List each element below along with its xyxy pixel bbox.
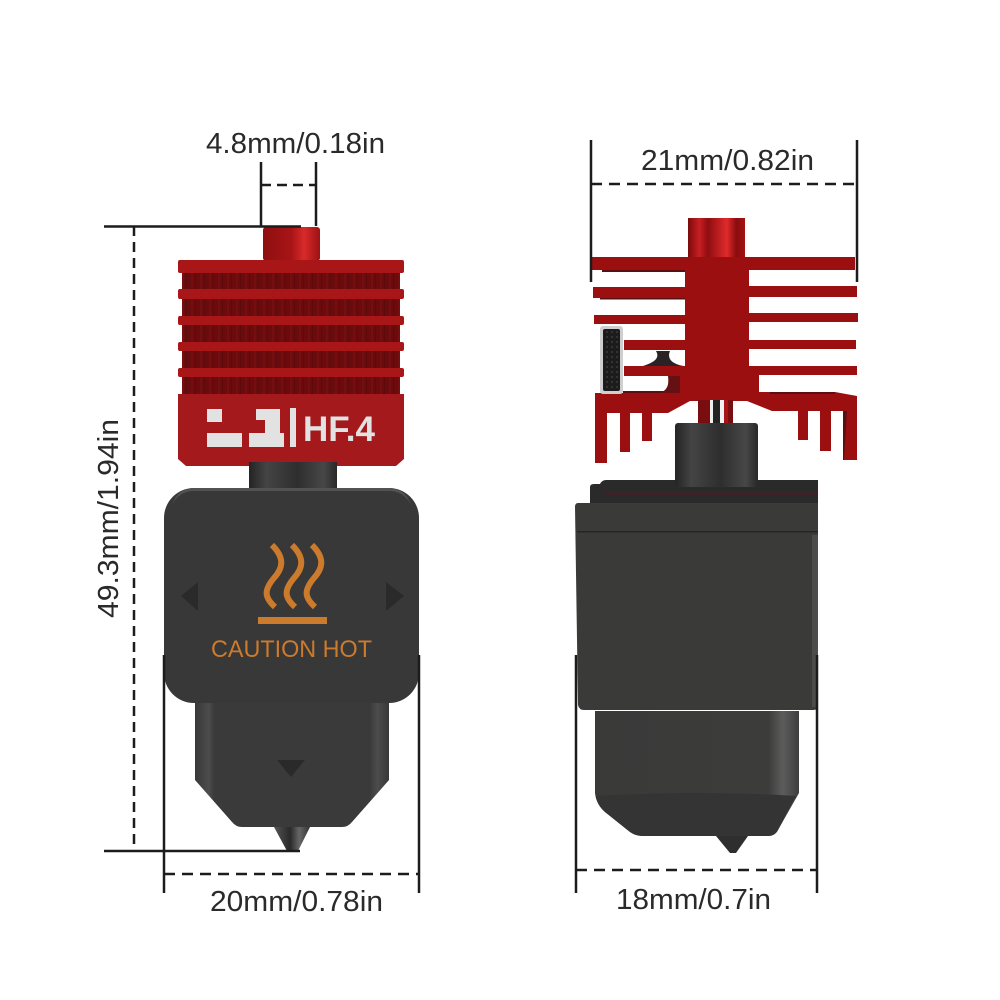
label: front width: 20mm/0.78in (210, 886, 383, 918)
bridge shadow (643, 351, 684, 366)
side heatsink (592, 257, 858, 463)
label: heatsink width: 21mm/0.82in (641, 145, 814, 177)
heatbreak pipes (698, 400, 733, 424)
housing seam (577, 531, 818, 532)
plate red reflection (606, 491, 818, 495)
label: pin diameter: 4.8mm/0.18in (206, 128, 385, 160)
lower nozzle cover (195, 703, 389, 827)
logo: brand mark (207, 408, 376, 449)
pin: top tube (263, 227, 320, 261)
pin width dash (261, 184, 316, 186)
right view: hotend side (575, 218, 858, 853)
top right brackets (591, 140, 857, 282)
height extension lines (104, 226, 301, 851)
side width brackets (576, 655, 817, 893)
heater cover (164, 488, 419, 703)
icon: heat bar (258, 617, 327, 624)
icon: heat waves (267, 545, 321, 607)
front width brackets (164, 655, 419, 893)
heatsink: fins (178, 260, 404, 377)
dimension lines (104, 140, 857, 893)
label: height: 49.3mm/1.94in (93, 419, 125, 618)
side housing (575, 503, 818, 710)
lower cover bevel (596, 793, 796, 836)
side neck (675, 423, 758, 487)
top right dash (591, 183, 857, 185)
nozzle tip (274, 827, 310, 851)
logo: brand mark: HF.4 (303, 410, 376, 449)
left view: hotend front (164, 227, 419, 851)
side width dash (576, 869, 817, 871)
pin width brackets (261, 162, 316, 226)
icon: down arrow (277, 760, 305, 777)
upper plate (590, 480, 818, 505)
caution label: CAUTION HOT (211, 636, 372, 663)
label: side width: 18mm/0.7in (616, 884, 771, 916)
cover top edge highlight (172, 488, 411, 505)
neck (249, 462, 337, 492)
height dashed line (133, 226, 135, 851)
icon: right arrow (386, 582, 404, 611)
heatsink: ribbed core (182, 270, 400, 396)
base slot corner (660, 376, 680, 393)
front width dash (164, 873, 419, 875)
side nozzle tip (716, 836, 748, 853)
lower side cover (595, 711, 799, 836)
USB connector (600, 326, 623, 394)
housing highlight (812, 535, 818, 707)
fin shadow strips (600, 270, 847, 460)
heatsink: logo block (178, 394, 404, 466)
pin: side tube (688, 218, 745, 258)
icon: left arrow (181, 582, 198, 611)
